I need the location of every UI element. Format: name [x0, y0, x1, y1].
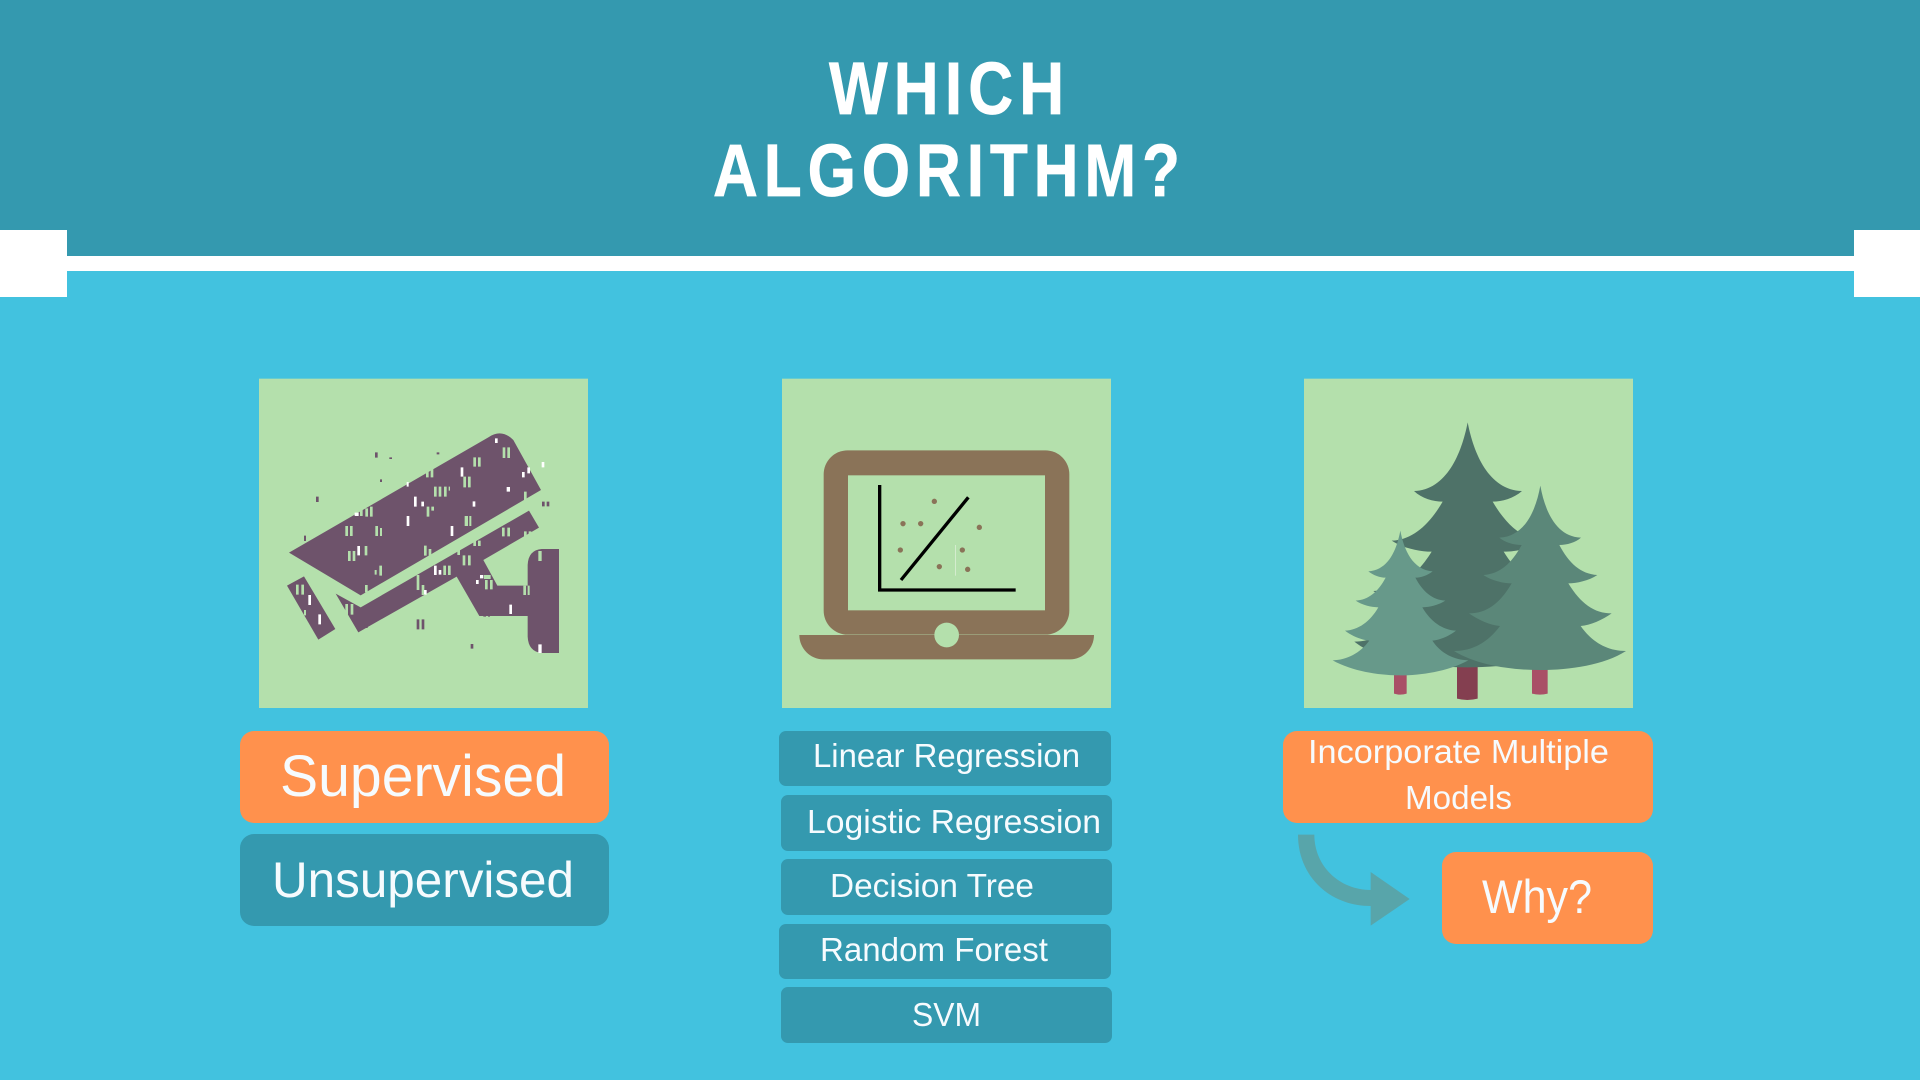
item: SVM: SVM — [912, 996, 981, 1033]
icon: laptop with scatter plot — [782, 379, 1111, 708]
icon: three pine trees — [1304, 379, 1633, 708]
label: Unsupervised: Unsupervised — [272, 852, 574, 908]
title: WHICH — [829, 48, 1064, 130]
item: Random Forest: Random Forest — [820, 931, 1048, 968]
item: Logistic Regression: Logistic Regression — [807, 803, 1101, 840]
label: Why? — [1442, 852, 1653, 944]
panel: algorithms list — [779, 379, 1112, 1043]
icon: security camera — [259, 379, 588, 708]
header band — [0, 0, 1920, 297]
arrow: curved to Why — [1298, 835, 1410, 926]
title: ALGORITHM? — [713, 130, 1180, 212]
label: Incorporate Multiple Models — [1283, 731, 1653, 823]
label: Why?: Why? — [1482, 870, 1592, 923]
label: Incorporate Multiple Models: Incorporate Multiple — [1308, 733, 1609, 770]
item: Decision Tree: Decision Tree — [830, 867, 1034, 904]
label: Supervised: Supervised — [280, 744, 566, 809]
item: Decision Tree — [781, 859, 1112, 915]
panel: ensemble models — [1283, 379, 1653, 944]
label: Supervised — [240, 731, 609, 823]
item: SVM — [781, 987, 1112, 1043]
item: Linear Regression: Linear Regression — [813, 737, 1080, 774]
title — [713, 48, 1180, 212]
label: Unsupervised — [240, 834, 609, 926]
item: Random Forest — [779, 924, 1111, 979]
item: Linear Regression — [779, 731, 1111, 786]
panel: supervised and unsupervised learning — [240, 379, 609, 926]
item: Logistic Regression — [781, 795, 1112, 851]
label: Incorporate Multiple Models: Models — [1405, 779, 1512, 816]
